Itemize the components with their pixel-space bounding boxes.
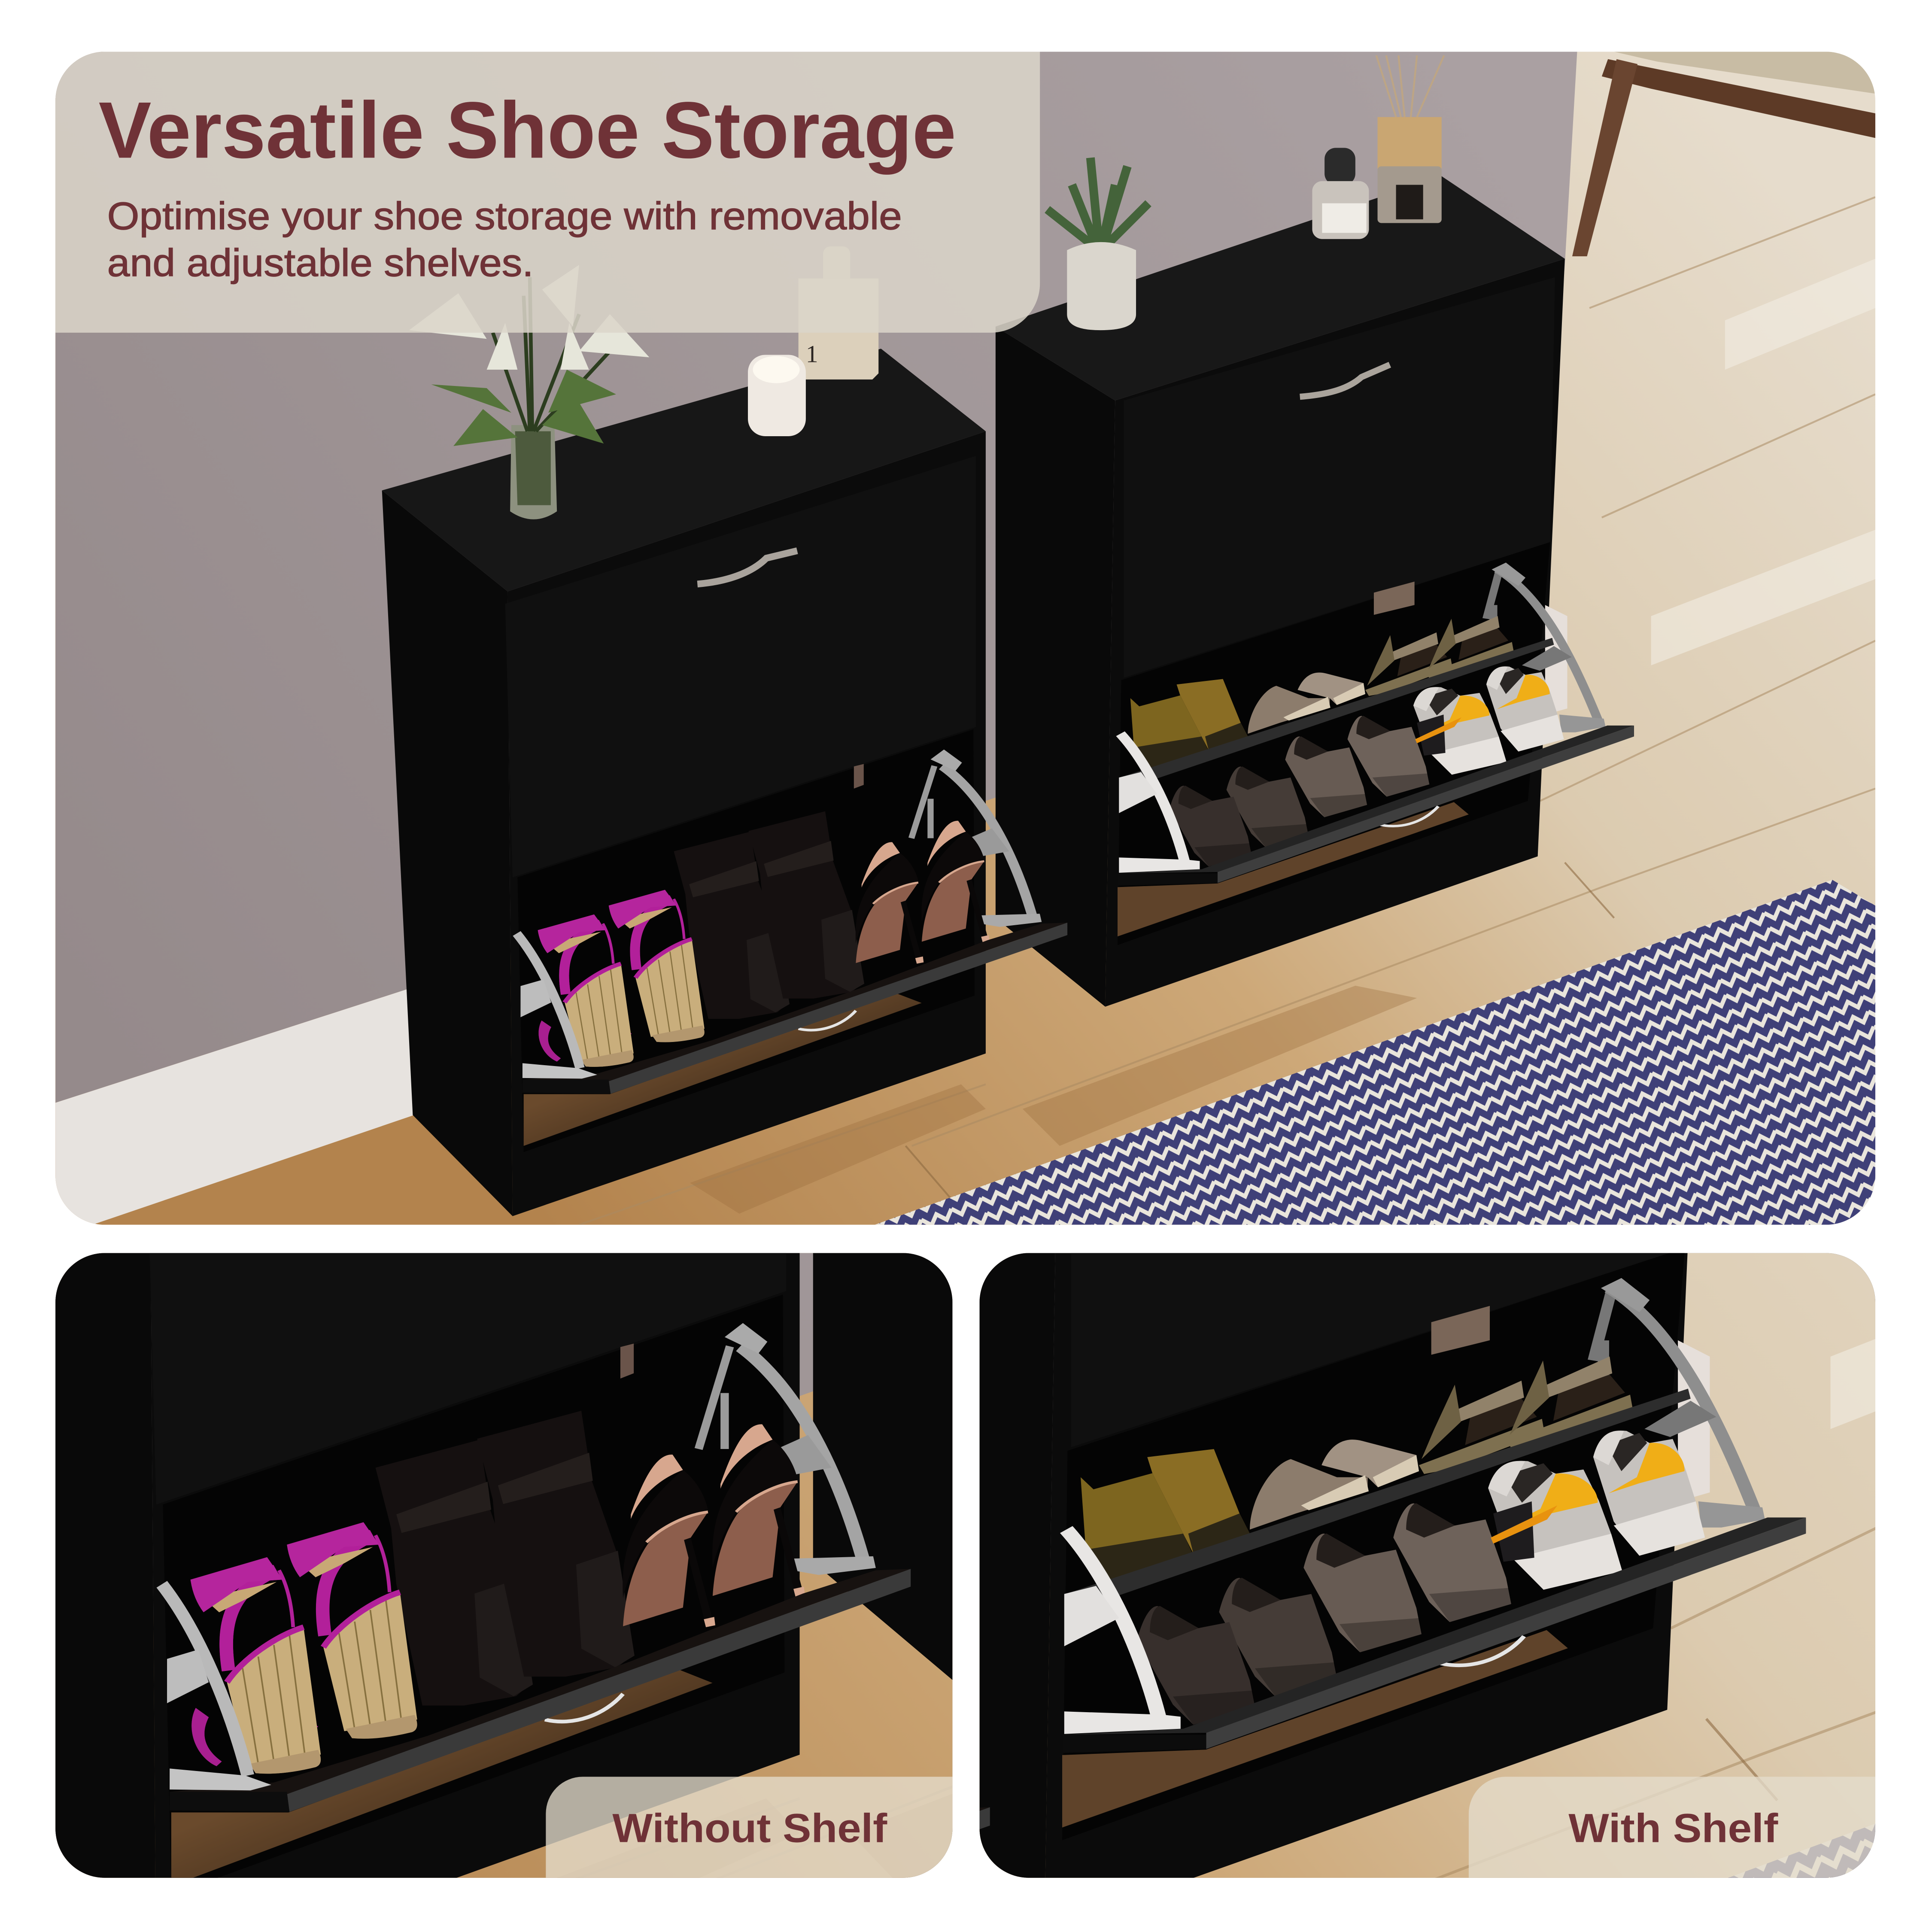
ankle boots: [674, 832, 790, 1019]
suede boots: [1177, 679, 1248, 750]
subtitle: and adjustable shelves.: [107, 241, 534, 285]
shelf bar: [1120, 638, 1554, 784]
chair: [1572, 52, 1875, 256]
panel: main room scene: [55, 52, 1875, 1225]
handle: [697, 551, 797, 584]
cabinet: left, without shelf: [382, 349, 1067, 1216]
label: with shelf: [1469, 1777, 1875, 1878]
brogues: [1348, 716, 1429, 797]
wedge sandals: [538, 914, 634, 1067]
subtitle: Optimise your shoe storage with removable: [107, 194, 902, 238]
stiletto pumps: [856, 842, 923, 964]
decor: reed diffuser: [1376, 55, 1444, 223]
title: Versatile Shoe Storage: [99, 85, 956, 175]
handle: [1300, 365, 1390, 397]
skirting board: [55, 988, 414, 1225]
grey hinge arm: [1486, 572, 1499, 638]
flap: [1118, 726, 1634, 873]
label: with shelf: With Shelf: [1568, 1805, 1778, 1851]
white hinge arm: [1121, 734, 1185, 865]
decor: small fragrance bottle: [1312, 148, 1369, 239]
cabinet: right, with shelf: [996, 176, 1634, 1007]
shoes, left cabinet: [517, 750, 1067, 1094]
loafers: [1297, 673, 1365, 705]
label: without shelf: Without Shelf: [612, 1805, 887, 1851]
sandals: [1365, 632, 1452, 696]
white hinge arm: [517, 933, 580, 1068]
close-up: cabinet with shelf and shoes: [0, 451, 1932, 1932]
decor: perfume bottle: [799, 246, 878, 380]
decor: perfume bottle: 1: [806, 341, 818, 368]
wooden floor: [0, 0, 1932, 1355]
shoes and shelf, right cabinet: [1118, 562, 1634, 886]
trainers: [1486, 666, 1564, 751]
decor: calla lily vase: [409, 265, 649, 519]
panel: with shelf: [0, 451, 1932, 1932]
label: without shelf: [546, 1777, 952, 1878]
grey hinge arm: [911, 766, 934, 838]
wall: [55, 52, 1577, 1103]
subtitle: [107, 194, 902, 285]
rug: [875, 880, 1875, 1225]
decor: potted plant: [1047, 158, 1148, 330]
title banner: [55, 52, 1040, 333]
decor: candle: [748, 355, 806, 436]
